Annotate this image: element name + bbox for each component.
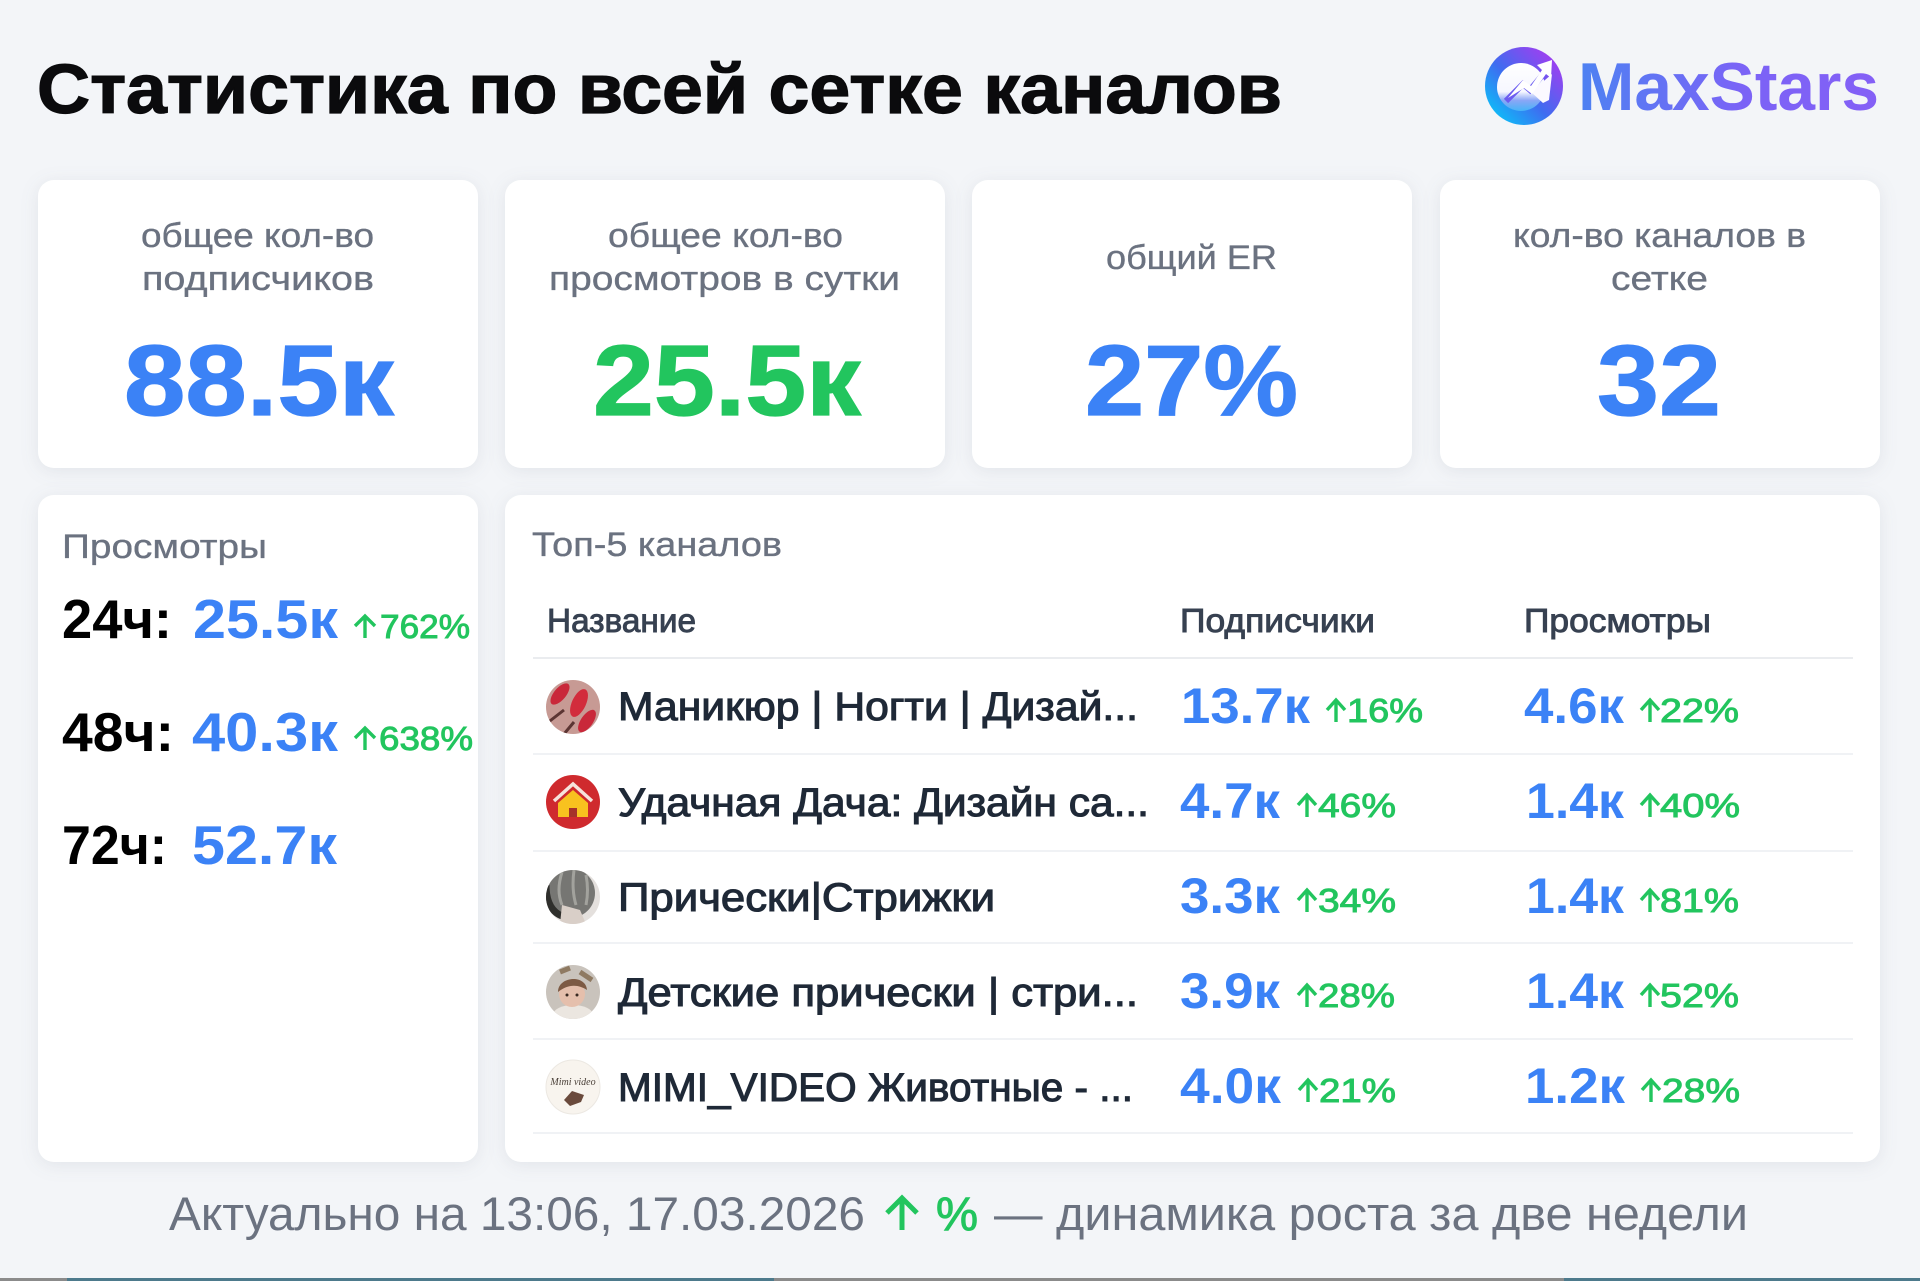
row: hairstyles channel: 81% [1660,882,1739,919]
footer note [169,1187,1748,1240]
table header: Просмотры [1524,602,1711,639]
footer note: % [936,1187,978,1240]
row: garden channel: 1.4к [1526,773,1625,829]
row: kids hairstyles channel: 52% [1660,977,1739,1014]
row: mimi video channel [546,1058,1740,1114]
row: manicure channel [546,678,1739,735]
table header: Название [547,602,696,639]
row: hairstyles channel: 1.4к [1526,868,1625,924]
row: manicure channel: 13.7к [1181,678,1311,734]
row: kids hairstyles channel: 1.4к [1526,963,1625,1019]
row: kids hairstyles channel: Детские прически | стри... [618,971,1138,1015]
table header: Подписчики [1180,602,1375,639]
panel: channels count: 32 [1597,325,1721,437]
panel: channels count: кол-во каналов в [1513,217,1806,255]
panel: subscribers total: 88.5к [124,325,395,437]
avatar: child [546,965,600,1025]
footer note: — динамика роста за две недели [994,1187,1748,1240]
avatar: house [546,775,600,829]
row: garden channel [546,773,1740,829]
row: 72h: 72ч: [62,814,167,876]
row: garden channel: 4.7к [1180,773,1281,829]
row: hairstyles channel: Прически|Стрижки [618,876,995,920]
panel: daily views total: общее кол-во [608,217,843,255]
row: hairstyles channel: 3.3к [1180,868,1281,924]
panel: overall ER: 27% [1085,325,1298,437]
row: mimi video channel: 21% [1319,1072,1396,1109]
row: 72h [62,814,338,876]
row: kids hairstyles channel [546,965,1738,1019]
panel: subscribers total [38,180,478,468]
row: 48h: 40.3к [192,701,339,763]
avatar: red nails [546,680,600,735]
panel: views by period [38,495,478,1162]
row: 48h [62,701,473,763]
row: 24h: 25.5к [193,588,339,650]
logo: MaxStars [1485,47,1879,125]
row: manicure channel: 22% [1660,692,1739,729]
row: garden channel: Удачная Дача: Дизайн са... [618,781,1149,825]
panel: channels count: сетке [1611,260,1708,298]
row: 24h: 24ч: [62,588,172,650]
row: mimi video channel: 4.0к [1180,1058,1282,1114]
avatar: grey bob haircut [545,868,600,924]
row: kids hairstyles channel: 3.9к [1180,963,1281,1019]
row: hairstyles channel: 34% [1318,882,1396,919]
panel: daily views total [505,180,945,468]
row: 72h: 52.7к [192,814,338,876]
row: mimi video channel: 1.2к [1525,1058,1626,1114]
row: manicure channel: 16% [1347,692,1423,729]
footer note: Актуально на 13:06, 17.03.2026 [169,1187,865,1240]
row: 48h: 48ч: [62,701,174,763]
row: mimi video channel: 28% [1662,1072,1740,1109]
row: manicure channel: Маникюр | Ногти | Дизай... [618,685,1138,729]
logo wordmark: MaxStars [1578,49,1879,125]
title: Статистика по всей сетке каналов [37,50,1282,128]
panel: daily views total: просмотров в сутки [549,260,900,298]
row: garden channel: 46% [1318,787,1396,824]
row: kids hairstyles channel: 28% [1318,977,1395,1014]
row: hairstyles channel [545,868,1739,924]
icon: logo growth arrow [1485,47,1563,125]
row: 24h [62,588,470,650]
panel: subscribers total: подписчиков [142,260,374,298]
row: manicure channel: 4.6к [1524,678,1625,734]
row: 48h: 638% [379,720,473,757]
panel: overall ER [972,180,1412,468]
panel: channels count [1440,180,1880,468]
heading: views: Просмотры [62,528,267,566]
panel: overall ER: общий ER [1106,239,1277,277]
table header [547,602,1711,639]
heading: top 5: Топ-5 каналов [532,526,782,564]
panel: top 5 channels [505,495,1880,1162]
panel: subscribers total: общее кол-во [141,217,374,255]
row: mimi video channel: MIMI_VIDEO Животные - ... [618,1066,1133,1110]
avatar: mimi video: Mimi video [549,1077,596,1088]
row: 24h: 762% [380,608,470,645]
row: garden channel: 40% [1660,787,1740,824]
panel: daily views total: 25.5к [593,325,862,437]
avatar: mimi video [546,1060,600,1114]
